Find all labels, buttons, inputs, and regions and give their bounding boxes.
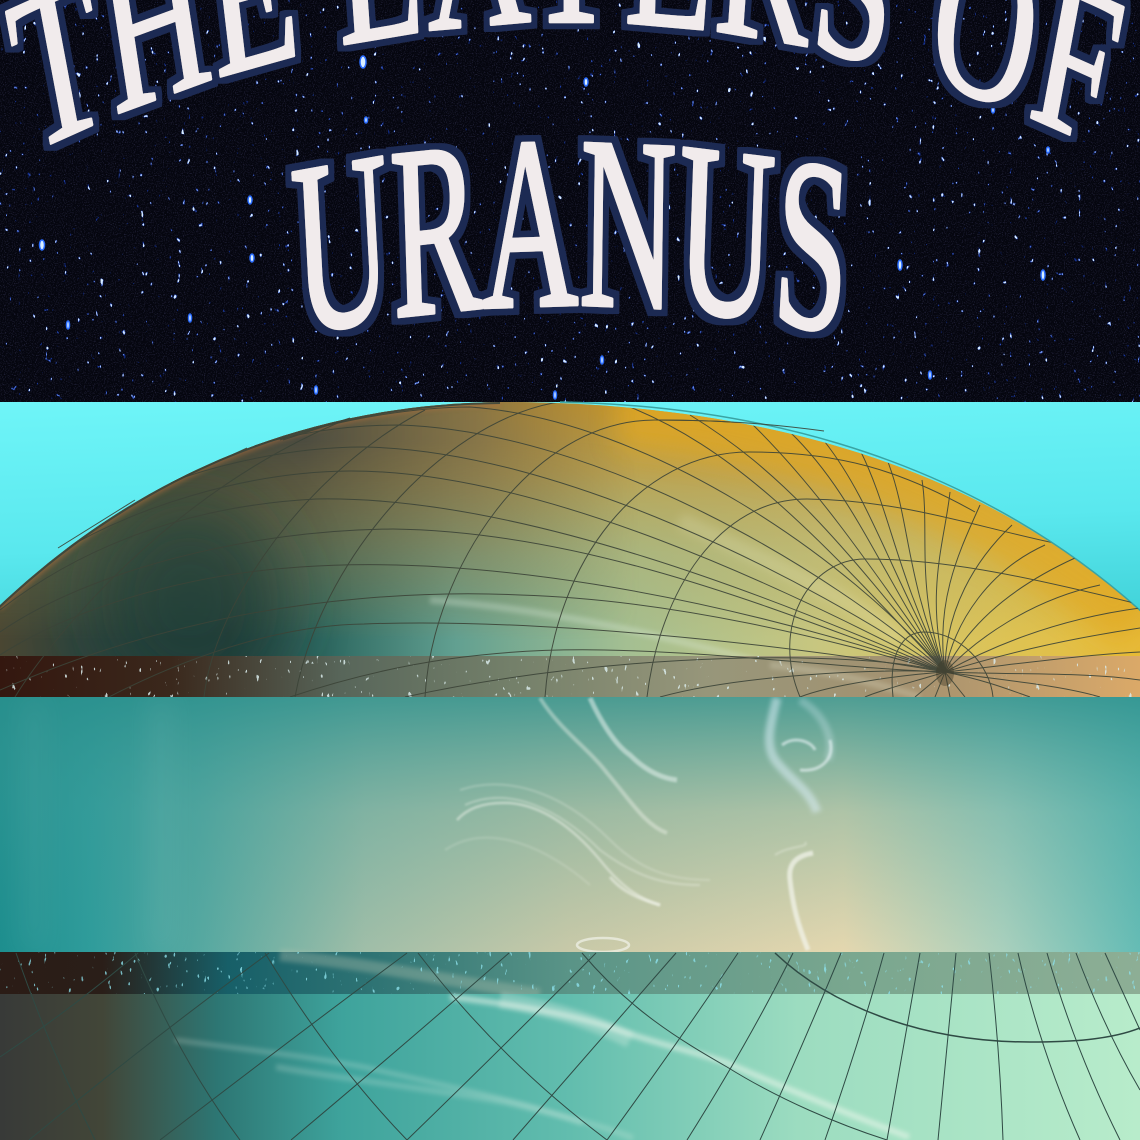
dark stratum band with specks (upper) [0,656,1140,697]
lower layer panel [0,994,1140,1140]
icon: planet pole [936,660,954,686]
planet latitude and longitude grid [0,401,1140,697]
starfield background [0,0,1140,402]
middle layer panel [0,697,1140,952]
turquoise sky behind planet [0,402,1140,697]
dark stratum band with specks (lower) [0,952,1140,994]
title: Uranus: URANUS [285,135,848,338]
planet dome: outer layer [0,401,1140,656]
lower planet grid lines [0,953,1140,1140]
